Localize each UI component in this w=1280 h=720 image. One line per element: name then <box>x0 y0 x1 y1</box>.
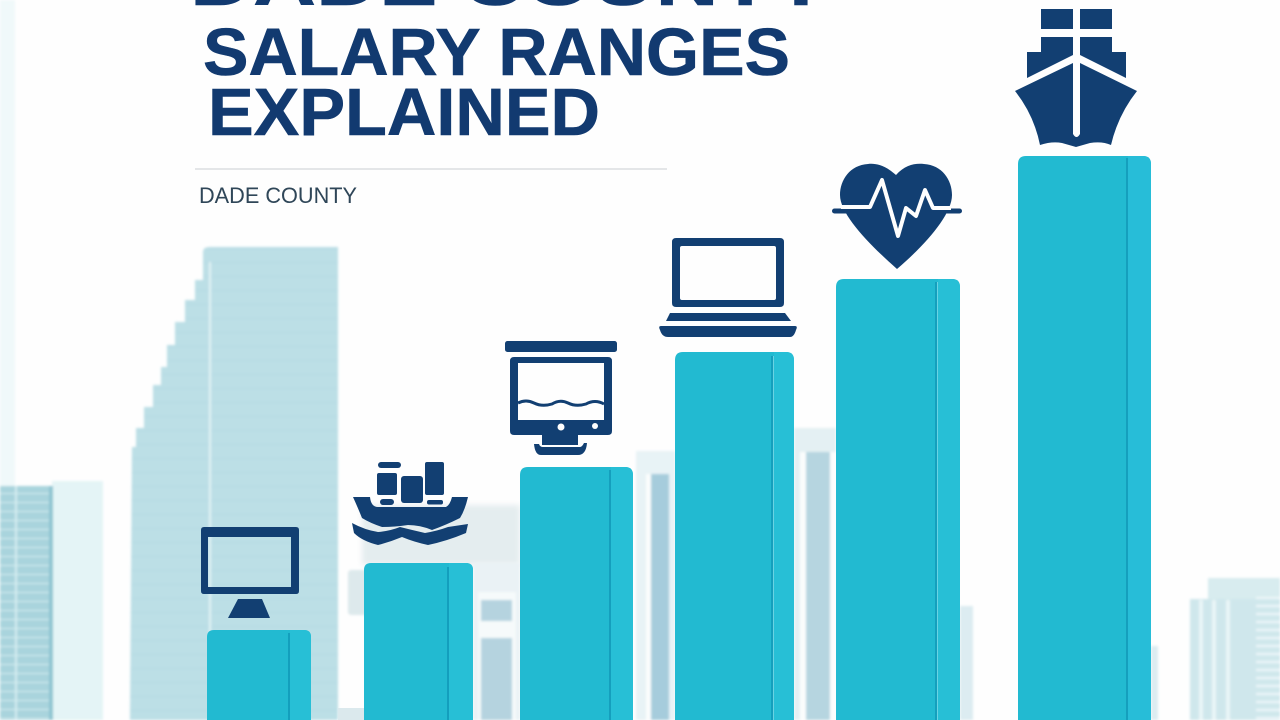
bar 4 <box>675 352 794 720</box>
bar 2 <box>364 563 473 720</box>
icon: laptop <box>659 238 797 337</box>
icon: cargo boat <box>352 462 468 545</box>
icon: container ship <box>1015 9 1137 147</box>
title <box>190 0 830 150</box>
bar 6 <box>1018 156 1151 720</box>
building: center behind bars <box>338 505 520 720</box>
subtitle text: DADE COUNTY <box>199 183 357 208</box>
building: between bars three and four <box>636 451 675 720</box>
bar 5 <box>836 279 960 720</box>
bar 3 <box>520 467 633 720</box>
building: far left <box>0 0 103 720</box>
icon: screen with wave <box>505 341 617 455</box>
building: between bars four and five <box>794 428 836 720</box>
building: stepped tower <box>130 247 338 720</box>
title line: salary ranges: SALARY RANGES <box>203 15 790 90</box>
building: slivers right of bars <box>960 606 1158 720</box>
icon: desktop monitor <box>201 527 299 618</box>
title line: explained: EXPLAINED <box>208 75 600 150</box>
bar 1 <box>207 630 311 720</box>
icon: heart with pulse <box>832 164 962 269</box>
bar chart <box>207 156 1151 720</box>
building: far right <box>1190 578 1280 720</box>
